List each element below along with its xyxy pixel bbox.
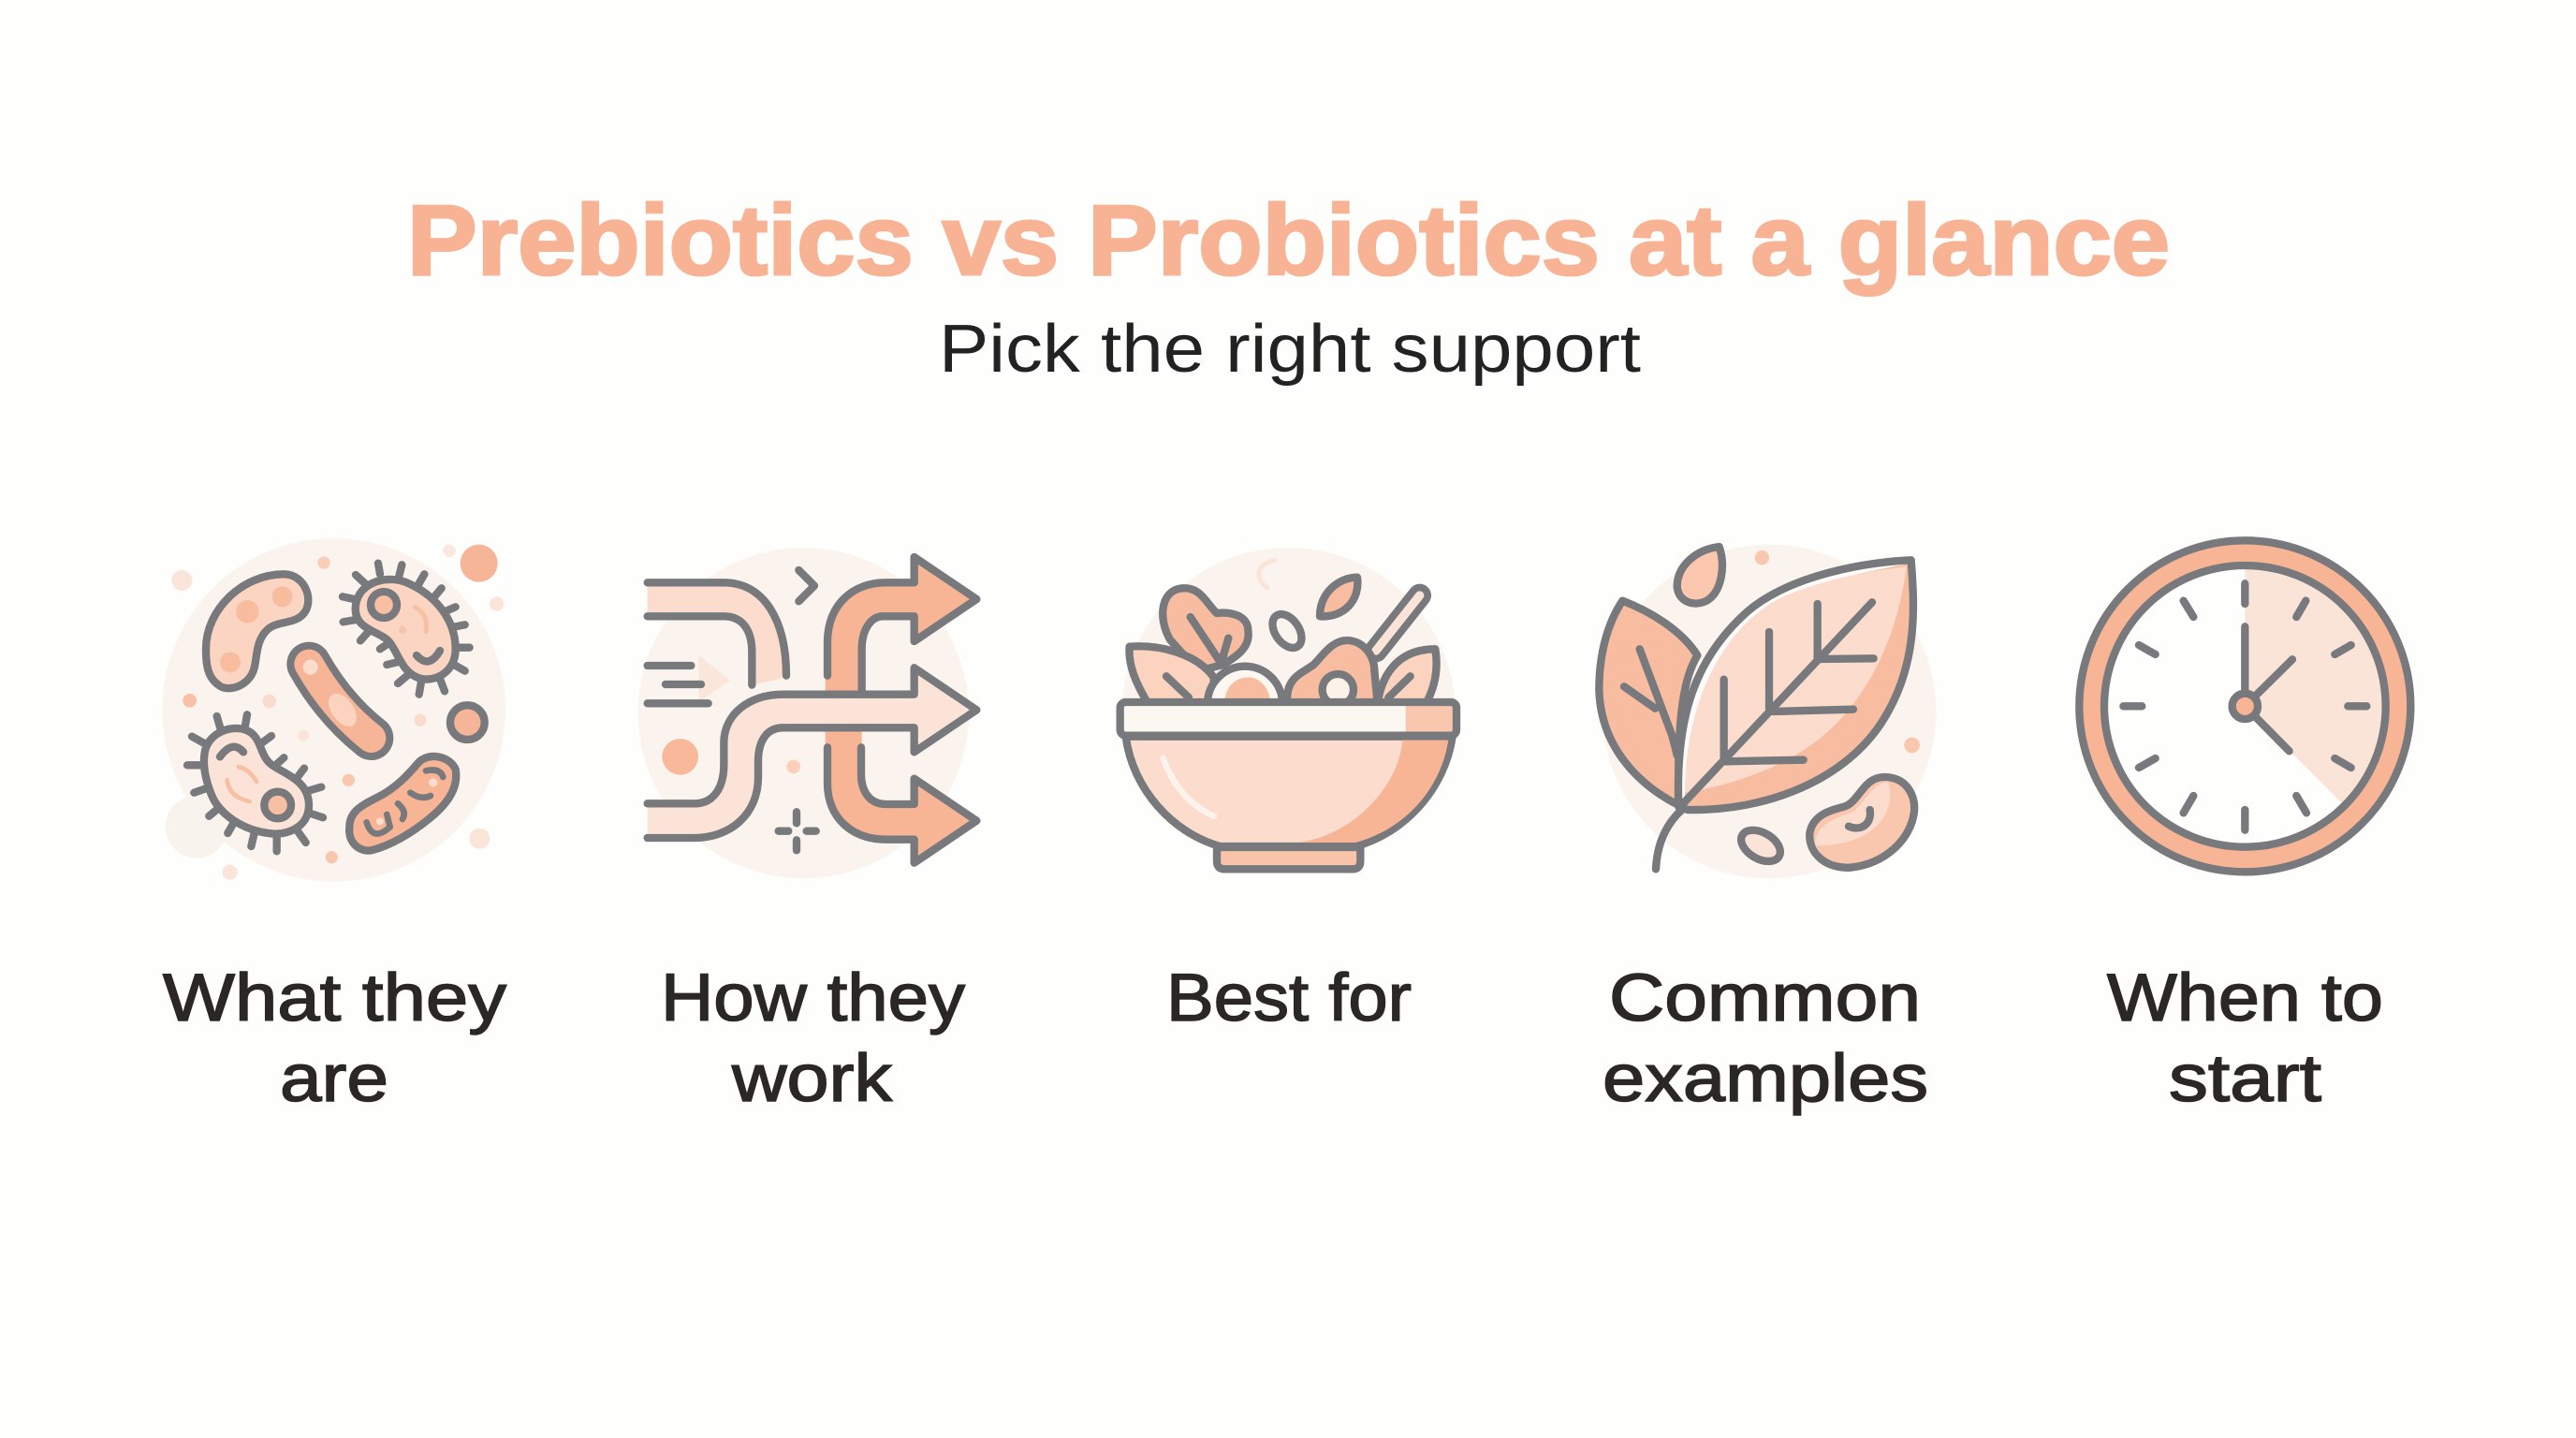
label: what they are: are: [280, 1042, 388, 1116]
icon: clock: [2079, 540, 2410, 872]
label: when to start: start: [2169, 1042, 2321, 1116]
label: how they work: How they: [661, 961, 966, 1035]
label: common examples: [1603, 961, 1928, 1116]
icon: salad bowl: [1120, 548, 1456, 882]
label: common examples: Common: [1609, 961, 1921, 1035]
label: when to start: When to: [2107, 961, 2383, 1035]
label: best for: Best for: [1166, 961, 1412, 1035]
icon: branching arrows: [638, 548, 976, 878]
icon: leaves and legumes: [1599, 545, 1936, 878]
label: what they are: [163, 961, 507, 1116]
label: what they are: What they: [163, 961, 507, 1035]
label: how they work: work: [731, 1042, 893, 1116]
label: common examples: examples: [1603, 1042, 1928, 1116]
title: Prebiotics vs Probiotics at a glance: [407, 185, 2170, 296]
icon: bacteria: [162, 538, 505, 882]
label: how they work: [661, 961, 966, 1116]
subtitle: Pick the right support: [939, 312, 1641, 387]
label: when to start: [2107, 961, 2383, 1116]
